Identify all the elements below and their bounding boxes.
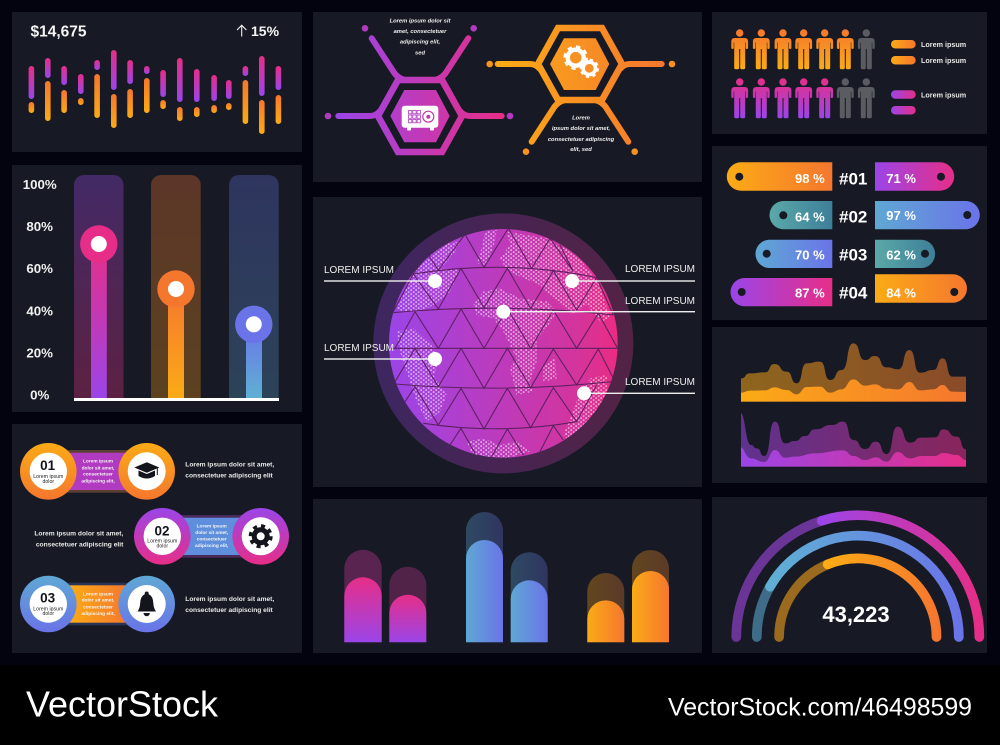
pink bar group (344, 550, 426, 642)
step 01 description: Lorem ipsum dolor sit amet, (185, 461, 274, 468)
icon: bell (138, 592, 156, 616)
y axis labels: 20% (26, 346, 53, 361)
y axis labels (23, 177, 57, 403)
column 1 (74, 175, 124, 398)
inner gauge arc (779, 558, 936, 637)
text above magenta hexagon: Lorem ipsum dolor sit (390, 18, 452, 24)
column 3 (229, 175, 279, 398)
pink people row (731, 78, 875, 118)
orange area chart (741, 343, 966, 402)
text above magenta hexagon: adipiscing elit, (400, 40, 441, 46)
step 03: adipiscing elit, (81, 611, 115, 617)
panel: grouped rounded bars (313, 499, 702, 653)
row 02 (769, 201, 980, 229)
text above magenta hexagon: amet, consectetuer (394, 29, 447, 35)
callout: top left (324, 265, 442, 288)
panel: numbered steps (12, 424, 302, 653)
blue bar group (466, 512, 548, 642)
step 01: consectetuer (83, 472, 113, 478)
magenta hexagon with safe (325, 25, 513, 152)
callout: lower right (577, 377, 695, 400)
step 01: dolor sit amet, (82, 465, 115, 471)
step 01: dolor (43, 479, 54, 485)
step 01 description (185, 461, 274, 479)
purple area chart (741, 413, 966, 467)
step 02: consectetuer (197, 537, 227, 543)
y axis labels: 0% (30, 388, 49, 403)
row 03: 62 % (886, 248, 916, 263)
panel: people pictograms (712, 12, 987, 134)
step 03 (20, 576, 274, 632)
text below orange hexagon: elit, sed (570, 147, 592, 153)
step 02 (34, 508, 289, 565)
y axis labels: 80% (26, 219, 53, 234)
step 02: dolor (157, 544, 168, 550)
step 01: Lorem ipsum (83, 459, 113, 465)
orange people row (731, 29, 875, 69)
text below orange hexagon (548, 116, 615, 153)
row 01 (727, 162, 954, 191)
callout: lower right: LOREM IPSUM (625, 377, 695, 388)
step 01: adipiscing elit, (81, 478, 115, 484)
panel: percentage column chart (12, 165, 302, 412)
chart baseline (74, 398, 279, 401)
panel: revenue sound-wave bars (12, 12, 302, 152)
gauge value: 43,223 (822, 602, 890, 627)
callout: top left: LOREM IPSUM (324, 265, 394, 276)
step 03: dolor (43, 611, 54, 617)
step 02: dolor sit amet, (195, 530, 229, 536)
row 01: #01 (839, 169, 867, 188)
row 03: #03 (839, 246, 867, 265)
text above magenta hexagon: sed (415, 50, 425, 56)
orange hexagon with gears (486, 28, 675, 155)
text below orange hexagon: Lorem (572, 116, 590, 122)
step 03 description: consectetuer adipiscing elit (185, 607, 274, 614)
callout: top right: LOREM IPSUM (625, 264, 695, 275)
icon: graduation cap (134, 462, 159, 478)
callout: lower left: LOREM IPSUM (324, 343, 394, 354)
orange bar group (587, 550, 669, 642)
panel: hexagon diagrams (313, 12, 702, 182)
panel: globe (313, 197, 702, 487)
chart: pink upper bars (29, 50, 281, 102)
step 02: Lorem ipsum (197, 524, 227, 530)
step 02: Lorem ipsum (147, 539, 177, 545)
icon: up arrow (237, 25, 246, 36)
revenue value: $14,675 (30, 24, 87, 40)
row 02: #02 (839, 207, 867, 226)
y axis labels: 40% (26, 303, 53, 318)
y axis labels: 100% (23, 177, 57, 192)
row 04: #04 (839, 283, 868, 302)
row 03 (755, 240, 935, 268)
step 03: consectetuer (83, 604, 113, 610)
step 03: Lorem ipsum (33, 606, 63, 612)
step 01 (20, 443, 274, 500)
row 01: 71 % (886, 171, 916, 186)
footer brand: VectorStock (26, 684, 219, 725)
step 02 description: Lorem ipsum dolor sit amet, (34, 531, 123, 538)
callout: top right (565, 264, 695, 288)
callout: lower left (324, 343, 442, 366)
step 03: Lorem ipsum (83, 591, 113, 597)
row 04: 87 % (795, 286, 825, 301)
icon: gears (565, 47, 598, 77)
column 2 (151, 175, 201, 398)
globe sphere with mesh and dotted continents (373, 213, 633, 473)
middle gauge arc (757, 536, 959, 637)
step 01 description: consectetuer adipiscing elit (185, 472, 274, 479)
step 02 description (34, 531, 124, 549)
icon: safe (402, 106, 438, 130)
text below orange hexagon: ipsum dolor sit amet, (552, 126, 611, 132)
legend: Lorem ipsum (921, 56, 966, 65)
y axis labels: 60% (26, 261, 53, 276)
row 04 (730, 274, 967, 306)
legend: Lorem ipsum (921, 90, 966, 99)
step 02: 02 (154, 523, 170, 538)
panel: ranked percentage tags (712, 146, 987, 320)
panel: semicircle gauge (712, 497, 987, 653)
footer url: VectorStock.com/46498599 (668, 695, 972, 722)
step 02 description: consectetuer adipiscing elit (36, 542, 124, 549)
row 02: 64 % (795, 210, 825, 224)
step 03: dolor sit amet, (82, 598, 115, 604)
panel: area charts (712, 327, 987, 483)
row 02: 97 % (886, 208, 916, 223)
row 04: 84 % (886, 286, 916, 301)
step 03 description: Lorem ipsum dolor sit amet, (185, 596, 274, 603)
text below orange hexagon: consectetuer adipiscing (548, 137, 615, 143)
callout: middle right (496, 296, 695, 319)
step 03 description (185, 596, 274, 614)
step 02: adipiscing elit, (195, 543, 229, 549)
step 01: 01 (40, 458, 56, 473)
footer bar (0, 665, 1000, 745)
callout: middle right: LOREM IPSUM (625, 296, 695, 307)
icon: gear (250, 526, 271, 547)
row 03: 70 % (795, 248, 825, 263)
growth percentage: 15% (251, 23, 280, 39)
legend: Lorem ipsum (921, 40, 966, 49)
chart: orange lower bars (29, 74, 281, 134)
text above magenta hexagon (390, 18, 452, 56)
outer gauge arc (736, 515, 979, 637)
legend (891, 40, 966, 114)
step 03: 03 (40, 590, 56, 605)
step 01: Lorem ipsum (33, 474, 63, 480)
row 01: 98 % (795, 171, 825, 186)
